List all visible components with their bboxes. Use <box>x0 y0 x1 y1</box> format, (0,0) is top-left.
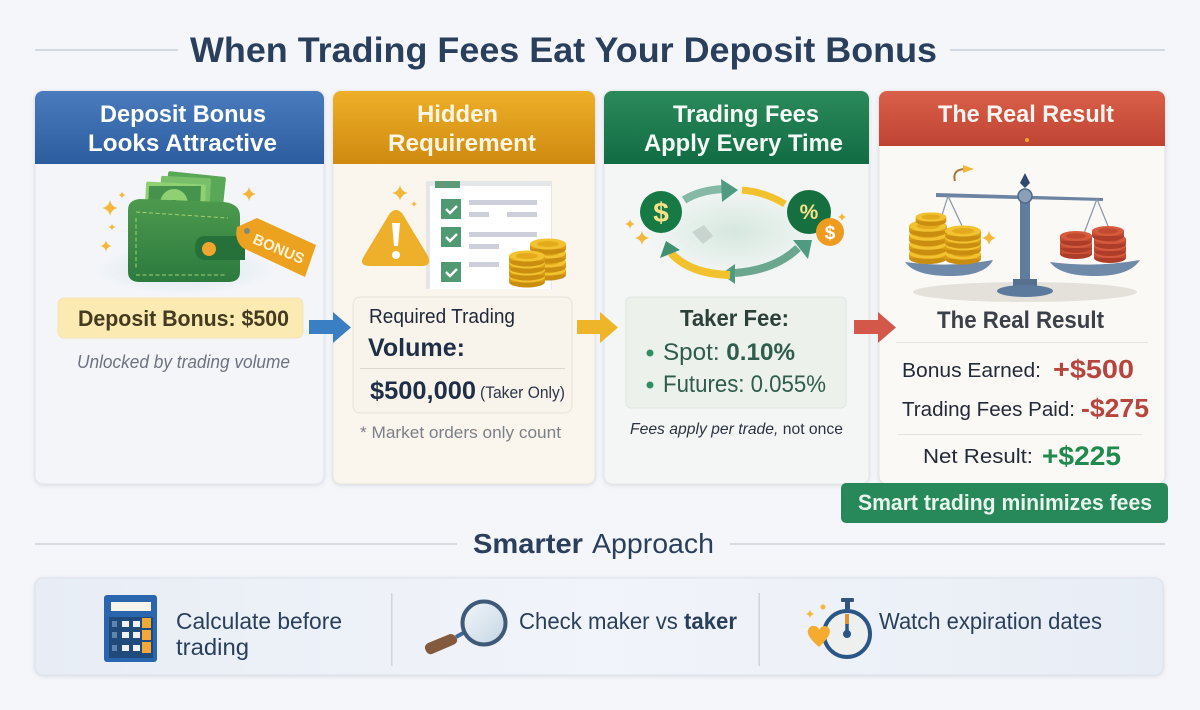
panel header: trading fees <box>604 91 869 164</box>
panel: trading fees <box>604 91 869 484</box>
icon: balance scale <box>905 138 1140 302</box>
panel: hidden requirement <box>333 91 595 484</box>
panel header: trading fees: Apply Every Time <box>644 130 843 157</box>
panel header: deposit bonus: Deposit Bonus <box>100 101 266 128</box>
row: bonus earned: Bonus Earned: <box>902 360 1041 382</box>
tip: expiration dates: Watch expiration dates <box>879 608 1102 634</box>
icon: magnifying glass <box>425 602 506 654</box>
callout: required trading volume: $500,000 <box>370 377 476 405</box>
callout: deposit bonus amount <box>58 298 303 338</box>
arrow: blue <box>309 312 351 343</box>
icon: stopwatch <box>806 598 870 657</box>
tip: calculate: trading <box>176 634 249 660</box>
arrow: red <box>854 312 896 343</box>
icon: checklist <box>426 181 552 289</box>
callout: deposit bonus amount: Deposit Bonus: $500 <box>78 306 289 331</box>
panel header: deposit bonus: Looks Attractive <box>88 130 277 157</box>
badge: smart trading <box>841 483 1168 523</box>
panel header: trading fees: Trading Fees <box>673 101 819 128</box>
callout: taker fee: Taker Fee: <box>680 305 789 331</box>
panel: real result <box>879 91 1165 484</box>
callout: taker fee: Spot: 0.10% <box>663 339 795 366</box>
icon: sparkles <box>100 187 256 252</box>
icon: wallet with bonus tag <box>95 171 316 294</box>
row: trading fees paid <box>902 393 1149 423</box>
icon: fee cycle: % <box>800 201 819 224</box>
icon: coin stacks <box>509 238 566 288</box>
row: trading fees paid: Trading Fees Paid: <box>902 399 1075 421</box>
callout: required trading volume: Required Trading <box>369 306 515 328</box>
heading: smarter approach <box>35 528 1165 559</box>
icon: wallet with bonus tag: BONUS <box>250 231 307 268</box>
row: trading fees paid: -$275 <box>1081 393 1149 423</box>
icon: fee cycle: $ <box>825 223 836 244</box>
icon: calculator <box>104 595 157 662</box>
callout: required trading volume <box>353 297 572 413</box>
badge: smart trading: Smart trading minimizes fees <box>858 490 1152 515</box>
panel header: hidden requirement: Hidden <box>417 101 498 128</box>
arrow: gold <box>577 312 618 343</box>
panel header: hidden requirement <box>333 91 595 164</box>
panel header: hidden requirement: Requirement <box>388 130 536 157</box>
callout: taker fee <box>626 297 846 408</box>
tip: calculate <box>176 608 342 660</box>
tip: calculate: Calculate before <box>176 608 342 634</box>
callout: required trading volume: (Taker Only) <box>480 383 565 402</box>
caption: fees apply: Fees apply per trade, not once <box>630 421 843 438</box>
caption: market orders: * Market orders only count <box>360 423 561 442</box>
icon: fee cycle: $ <box>653 197 669 228</box>
row: bonus earned: +$500 <box>1053 354 1134 384</box>
row: net result: Net Result: <box>923 446 1033 468</box>
callout: taker fee: Futures: 0.055% <box>663 371 826 398</box>
heading: smarter approach: Smarter <box>473 528 583 559</box>
panel header: deposit bonus <box>35 91 324 164</box>
icon: warning triangle <box>362 185 429 266</box>
row: net result <box>923 441 1121 471</box>
caption: unlocked: Unlocked by trading volume <box>77 352 290 372</box>
panel header: real result: The Real Result <box>938 101 1114 128</box>
row: bonus earned <box>902 354 1134 384</box>
panel: deposit bonus <box>35 91 324 484</box>
tip: maker vs taker: Check maker vs taker <box>519 608 737 634</box>
callout: required trading volume: Volume: <box>368 334 465 362</box>
panel header: real result <box>879 91 1165 146</box>
row: net result: +$225 <box>1042 441 1121 471</box>
heading: the real result: The Real Result <box>937 307 1104 334</box>
icon: fee cycle <box>625 179 846 284</box>
panel: smarter approach tips <box>35 578 1163 675</box>
title: When Trading Fees Eat Your Deposit Bonus <box>190 31 937 70</box>
heading: smarter approach: Approach <box>592 528 714 559</box>
